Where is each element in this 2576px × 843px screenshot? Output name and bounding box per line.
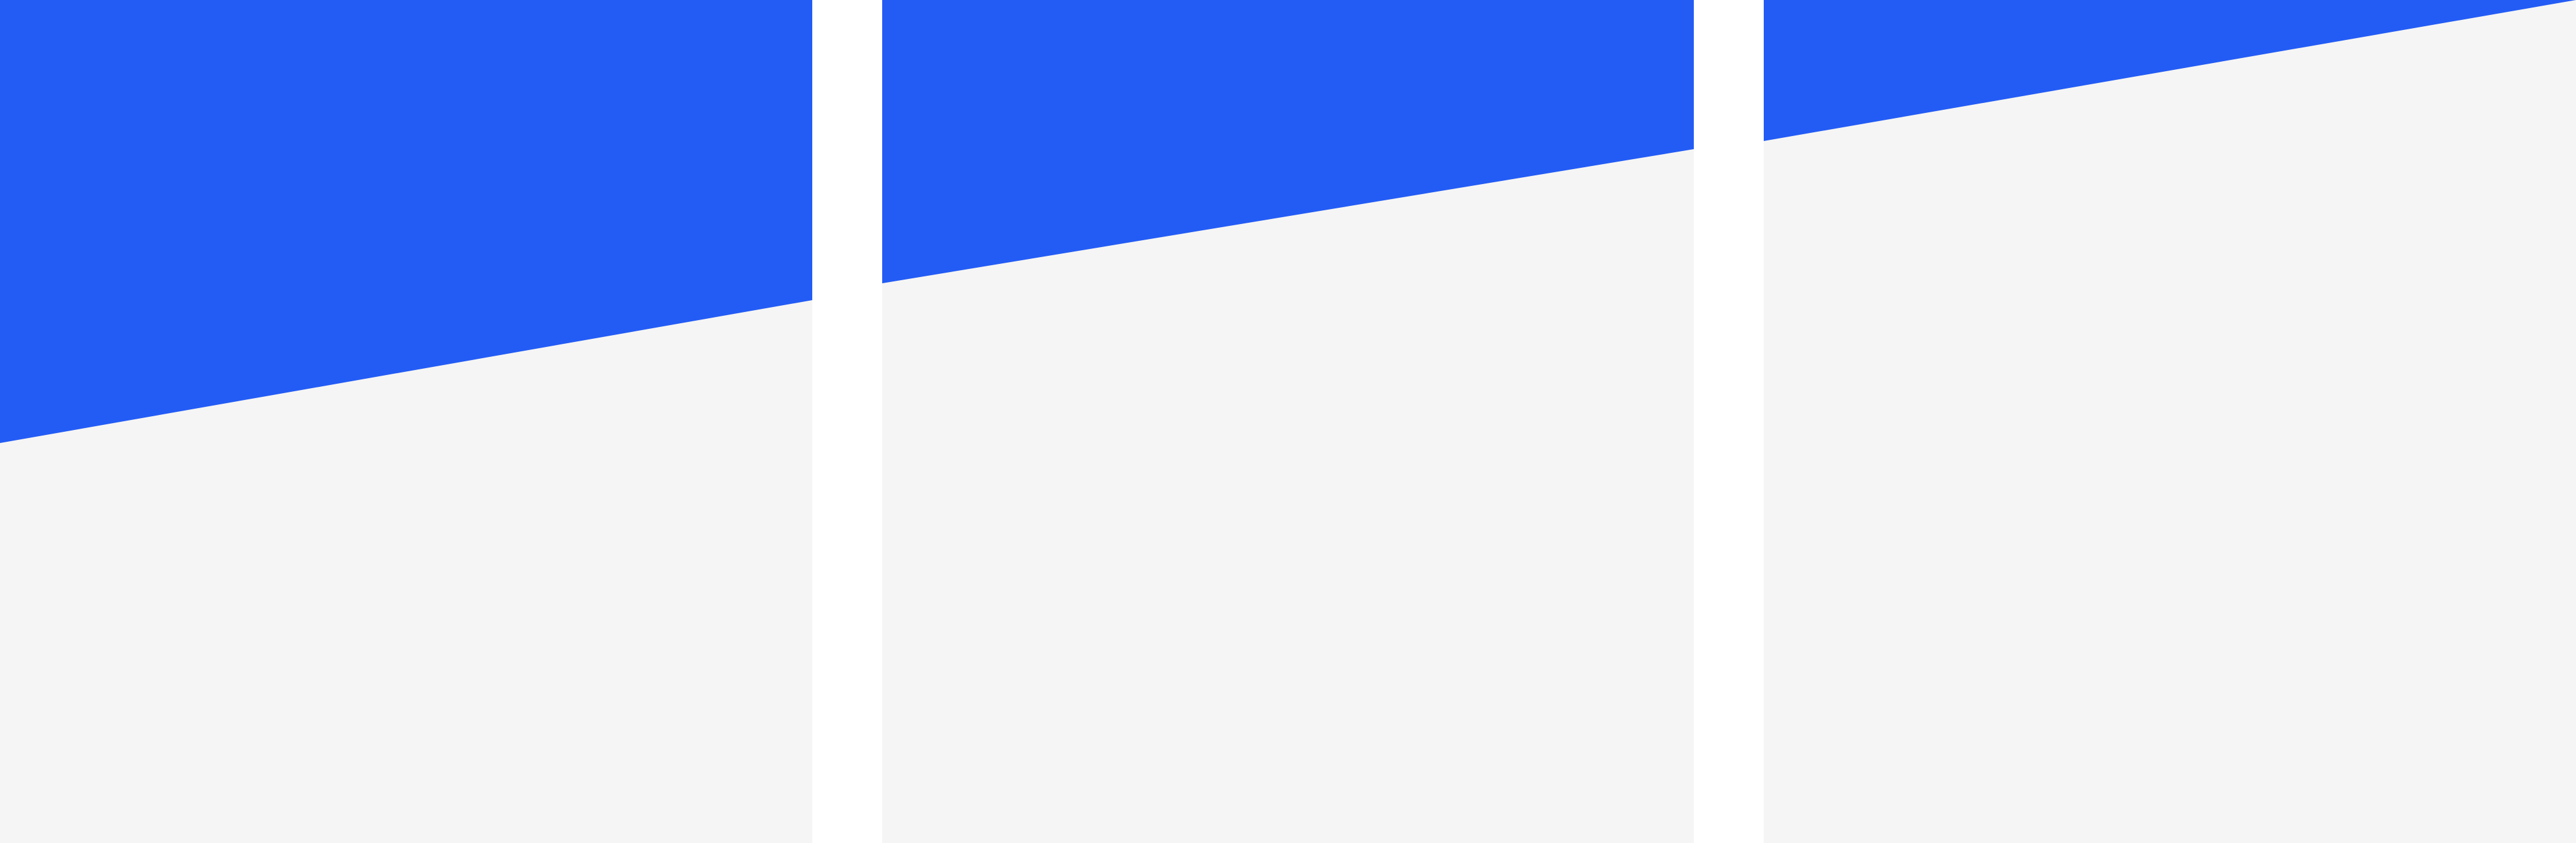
panel: right (1764, 0, 2576, 843)
blue band: left (0, 0, 812, 443)
blue band: right (1764, 0, 2576, 141)
panel: middle (882, 0, 1694, 843)
panel: left (0, 0, 812, 843)
blue band: middle (882, 0, 1694, 283)
